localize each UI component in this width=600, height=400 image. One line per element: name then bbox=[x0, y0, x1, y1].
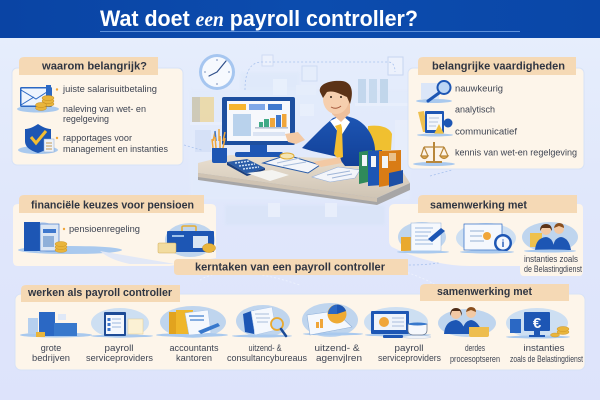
heading tab: werken als: werken als payroll controller bbox=[27, 287, 173, 299]
employer: grote bedrijven: bedrijven bbox=[32, 353, 70, 363]
icon: magnifier bbox=[416, 81, 452, 103]
icon: report with info badge: i bbox=[502, 239, 505, 250]
employer: accountantskantoren: kantoren bbox=[176, 353, 212, 363]
icon: signed document bbox=[397, 222, 449, 254]
employer: grote bedrijven bbox=[20, 312, 92, 363]
panel: belangrijke vaardigheden bbox=[408, 57, 584, 169]
heading: kerntaken van een payroll controller: kerntaken van een payroll controller bbox=[195, 262, 386, 274]
employer: uitzend- en consultancybureaus: uitzend- & bbox=[248, 343, 282, 353]
skills list: communicatief bbox=[455, 126, 518, 136]
icon: report with info badge bbox=[456, 223, 516, 254]
partner: payroll serviceproviders: payroll bbox=[394, 343, 424, 353]
label: instanties zoals de Belastingdienst: de Belastingdienst bbox=[524, 264, 582, 274]
calculator bbox=[227, 159, 265, 176]
heading tab: waarom belangrijk: waarom belangrijk? bbox=[41, 60, 147, 72]
bullet list: why important: juiste salarisuitbetaling bbox=[62, 84, 157, 94]
heading tab: financiele keuzes bbox=[19, 195, 204, 213]
partner: derden: procesoptseren bbox=[450, 354, 500, 364]
heading: kerntaken van een payroll controller bbox=[174, 259, 408, 275]
person bbox=[285, 81, 376, 167]
header banner bbox=[0, 0, 600, 38]
employer: uitzend- en consultancybureaus: consultancybureaus bbox=[227, 353, 307, 363]
employer: uitzend- en agentschappen: uitzend- & bbox=[314, 343, 360, 353]
panel: financiele keuzes voor pensioen bbox=[13, 195, 216, 266]
pencil cup bbox=[212, 129, 227, 163]
panel: werken als payroll controller bbox=[15, 284, 585, 370]
label: instanties zoals de Belastingdienst bbox=[524, 254, 582, 274]
employer: uitzend- en consultancybureaus bbox=[227, 305, 307, 363]
bullet list: why important bbox=[56, 84, 168, 154]
panel: waarom belangrijk bbox=[12, 57, 183, 165]
illustration: payroll controller at desk bbox=[198, 81, 410, 205]
icon: envelope and coins bbox=[17, 85, 59, 112]
background office scene bbox=[190, 55, 410, 225]
employer: accountantskantoren bbox=[156, 306, 228, 363]
label: pensioenregeling: pensioenregeling bbox=[69, 224, 140, 234]
icon: two officials bbox=[522, 222, 578, 252]
binders bbox=[359, 150, 403, 187]
monitor bbox=[222, 97, 295, 157]
employer: payroll serviceproviders bbox=[86, 308, 154, 363]
partner: derden: derdes bbox=[465, 343, 485, 353]
partner: instanties zoals de Belastingdienst: € bbox=[533, 315, 542, 332]
partner: payroll serviceproviders: serviceproviders bbox=[378, 353, 441, 363]
bullet list: why important: naleving van wet- en bbox=[63, 104, 146, 114]
panel: samenwerking met (middle) bbox=[389, 195, 583, 276]
bullet list: why important: regelgeving bbox=[63, 114, 109, 124]
heading tab: samenwerking met bbox=[420, 284, 569, 301]
partner: instanties zoals de Belastingdienst: instanties bbox=[524, 343, 565, 353]
partner: payroll serviceproviders bbox=[364, 307, 441, 363]
dashed connectors bbox=[110, 62, 462, 288]
employer: accountantskantoren: accountants bbox=[170, 343, 219, 353]
icon: scales of justice bbox=[413, 142, 455, 166]
employer: uitzend- en agentschappen: agenvjlren bbox=[316, 353, 362, 363]
skills list: analytisch bbox=[455, 104, 495, 114]
employer: uitzend- en agentschappen bbox=[302, 303, 363, 363]
partner: instanties zoals de Belastingdienst bbox=[506, 308, 583, 364]
employer: payroll serviceproviders: serviceproviders bbox=[86, 353, 154, 363]
heading tab: samenwerking met: samenwerking met bbox=[437, 286, 532, 298]
heading tab: werken als bbox=[21, 285, 180, 302]
heading tab: samenwerking met bbox=[418, 195, 577, 213]
skills list bbox=[455, 84, 577, 158]
title: Wat doet een payroll controller? bbox=[100, 6, 418, 31]
bullet list: why important: management en instanties bbox=[63, 144, 168, 154]
label: instanties zoals de Belastingdienst: instanties zoals bbox=[524, 254, 578, 264]
bullet list: why important: rapportages voor bbox=[63, 133, 132, 143]
papers and keyboard bbox=[247, 153, 360, 182]
employer: payroll serviceproviders: payroll bbox=[104, 343, 134, 353]
heading tab: waarom belangrijk bbox=[19, 57, 158, 75]
heading tab: belangrijke vaardigheden: belangrijke vaardigheden bbox=[432, 60, 565, 72]
heading tab: belangrijke vaardigheden bbox=[418, 57, 576, 75]
heading tab: financiele keuzes: financiële keuzes voor pensioen bbox=[31, 200, 194, 212]
heading tab: samenwerking met: samenwerking met bbox=[430, 200, 527, 212]
icon: clipboard bbox=[417, 111, 453, 136]
chair bbox=[368, 126, 392, 152]
employer: grote bedrijven: grote bbox=[41, 343, 61, 353]
skills list: nauwkeurig bbox=[455, 84, 503, 94]
skills list: kennis van wet-en regelgeving bbox=[455, 148, 577, 158]
icon: pension building bbox=[24, 222, 67, 252]
icon: shield with check bbox=[18, 124, 58, 154]
icon: briefcase and coins bbox=[158, 223, 216, 257]
illustration: clock bbox=[199, 54, 235, 90]
desk bbox=[198, 155, 410, 205]
partner: derden bbox=[438, 307, 500, 364]
